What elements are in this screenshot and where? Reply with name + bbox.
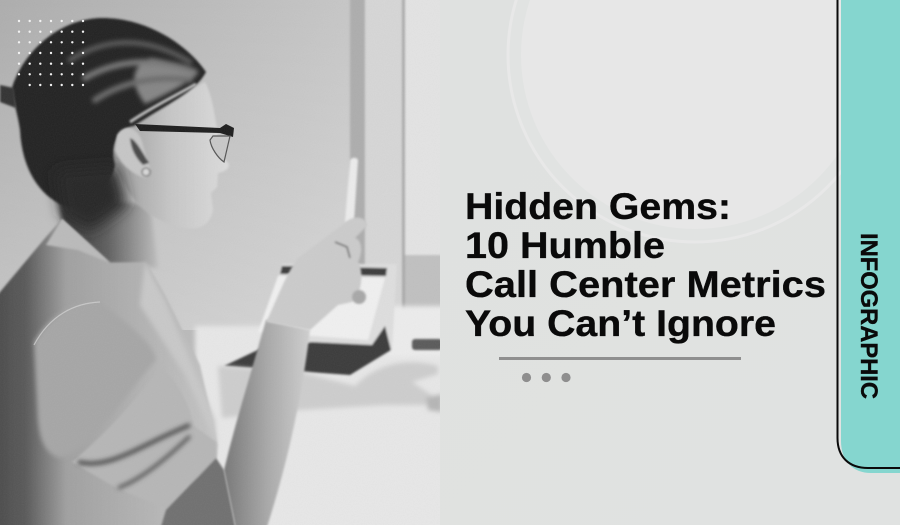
glasses <box>135 124 234 162</box>
upper arm <box>160 458 236 525</box>
hair front streak <box>130 84 196 122</box>
title: Hidden Gems: <box>465 186 731 227</box>
film grain <box>1 20 386 502</box>
hair highlights <box>70 43 198 104</box>
three dots <box>522 373 571 382</box>
placket <box>140 262 217 445</box>
rolled cuff <box>73 416 216 486</box>
raised hand <box>266 218 367 330</box>
title: Call Center Metrics <box>465 264 826 305</box>
hair mass <box>12 18 206 207</box>
fold shadows <box>78 425 190 488</box>
collar <box>46 219 110 263</box>
title: You Can’t Ignore <box>465 303 776 344</box>
neck <box>58 195 158 268</box>
tab label: INFOGRAPHIC <box>855 233 882 399</box>
ear and earring <box>115 128 150 178</box>
hair <box>0 18 206 232</box>
nape shadow <box>55 165 128 232</box>
teal infographic tab <box>838 0 900 473</box>
far arm and hand <box>218 362 442 418</box>
divider rule <box>499 357 741 360</box>
tab fill <box>841 0 900 473</box>
decorative circle <box>508 0 882 242</box>
right background panel <box>440 0 900 525</box>
laptop <box>224 264 442 375</box>
photo: woman at desk <box>0 0 450 525</box>
shirt body <box>0 219 218 525</box>
ponytail <box>0 85 16 108</box>
sleeve <box>34 301 156 458</box>
stylus pen <box>345 158 358 222</box>
raised forearm <box>224 320 310 525</box>
white dot pattern <box>18 20 84 86</box>
shirt <box>0 219 218 525</box>
title <box>465 186 826 344</box>
title: 10 Humble <box>465 225 665 266</box>
desk <box>195 306 450 525</box>
wall <box>0 0 350 512</box>
face <box>112 82 229 228</box>
tab black outline <box>838 0 900 468</box>
window and curtain <box>350 0 445 320</box>
sleeve stitch <box>34 302 100 345</box>
